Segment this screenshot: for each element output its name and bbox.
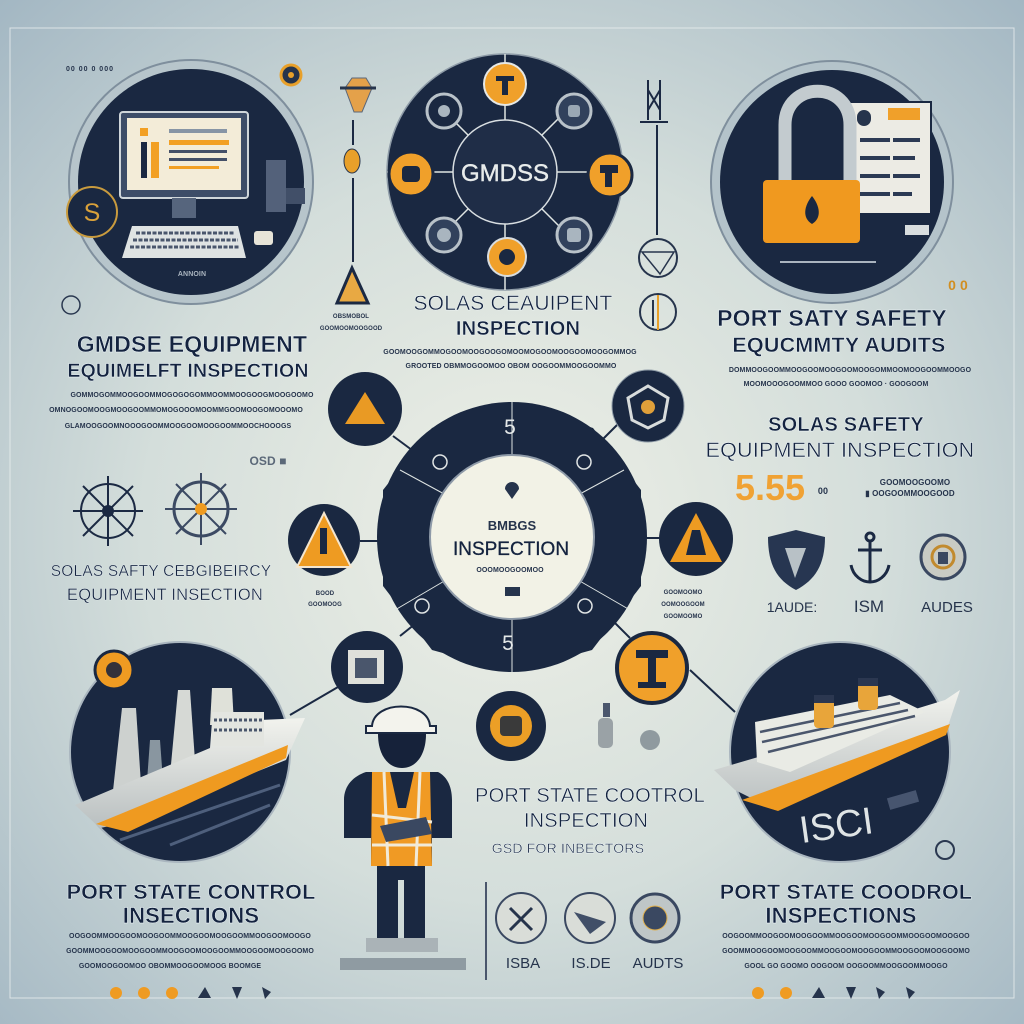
panel: GMDSS circle (387, 54, 632, 290)
heading: port state left: INSECTIONS (123, 903, 259, 928)
number: top 5: 5 (504, 416, 516, 439)
label: ISCI: ISCI (797, 800, 876, 852)
caption: right of number: ▮ OOGOOMMOOGOOD (865, 489, 955, 498)
icon: keyboard (122, 226, 273, 258)
text block: lower-left body (66, 933, 314, 970)
heading: port state center: PORT STATE COOTROL (475, 785, 705, 807)
icon: lighthouse column: OBSMOBOL (333, 314, 369, 320)
text block: lower-left body: OOGOOMMOOGOOMOOGOOMMOOGOOMOOGOOMMOOGOOMOOGO (69, 933, 311, 940)
icon: top-right shield node (612, 370, 684, 442)
icon: upper-right node (557, 94, 591, 128)
heading: SOLAS center (413, 292, 613, 340)
heading: port security: EQUCMMTY AUDITS (732, 333, 946, 357)
icon: Audits circle (631, 894, 679, 942)
icon: hard hat (366, 706, 436, 733)
small caption under computer: ANNOIN (178, 271, 206, 278)
icon: lower-right node (617, 633, 687, 703)
heading: port state center: INSPECTION (524, 810, 648, 832)
text block: lower-right body: OOGOOMMOOGOOMOOGOOMMOOGOOMOOGOOMMOOGOOMOOGOO (722, 933, 970, 940)
text block: lower-left body: GOOMMOOGOOMOOGOOMMOOGOOMOOGOOMMOOGOOMOOGOOMO (66, 948, 314, 955)
icon: badge (921, 535, 965, 579)
caption: right node: GOOMOOMO (664, 590, 703, 596)
heading: port state right (720, 880, 972, 928)
text block: center top body: GOOMOOGOMMOGOOMOOGOOGOMOOMOGOOMOOGOOMOOGOMMOG (383, 349, 637, 356)
heading: port state left (67, 880, 315, 928)
icons: lower-right dots (752, 987, 915, 999)
labels: right icons: ISM (854, 597, 884, 616)
caption: right node: GOOMOOMO (664, 614, 703, 620)
panel: computer circle (67, 60, 313, 304)
labels: right icons: AUDES (921, 599, 973, 616)
text block: lower-left body: GOOMOOGOOMOO OBOMMOOGOOMOOG BOOMGE (79, 963, 261, 970)
small label (887, 790, 919, 810)
icon: funnels (112, 688, 234, 800)
center text: INSPECTION (453, 539, 569, 560)
heading: port state right: INSPECTIONS (765, 903, 917, 928)
icons: lower-left dots (110, 987, 271, 999)
heading: port security: PORT SATY SAFETY (717, 305, 947, 331)
icon: top-left triangle node (328, 372, 402, 446)
heading: SOLAS left: EQUIPMENT INSECTION (67, 586, 263, 604)
caption: right node (661, 590, 705, 620)
panel: ship left (70, 642, 305, 862)
icon: bottom node (476, 691, 546, 761)
icon: anchor (851, 533, 889, 582)
icon: acorn (505, 482, 519, 499)
center text (453, 518, 569, 574)
heading: port state center: GSD FOR INBECTORS (492, 840, 644, 856)
text block: right top body (729, 367, 972, 388)
icon: top node (484, 63, 526, 105)
icon: ISDE circle (565, 893, 615, 943)
base (366, 938, 438, 952)
heading: SOLAS left (51, 563, 271, 604)
connector lines (290, 420, 735, 715)
heading: port state center (475, 785, 705, 856)
labels: lower icons (506, 955, 683, 972)
icon: s badge (67, 187, 117, 237)
icon: right node (588, 153, 632, 197)
icon: small orange dial (281, 65, 301, 85)
icon: upper-left node (427, 94, 461, 128)
icon: left node (389, 152, 433, 196)
caption: right of number: GOOMOOGOOMO (880, 478, 950, 487)
caption: left node (308, 591, 342, 608)
icon: small person figures (598, 703, 660, 750)
heading: SOLAS right: SOLAS SAFETY (768, 414, 924, 436)
icon: ship hull (75, 712, 305, 832)
heading: SOLAS left: SOLAS SAFTY CEBGIBEIRCY (51, 563, 271, 580)
divider line (485, 882, 487, 980)
labels: lower icons: AUDTS (633, 955, 683, 972)
icon: lower-right node (557, 218, 591, 252)
panel: central wheel (377, 402, 647, 672)
icon: small ring (62, 296, 80, 314)
icon: ship wheel (73, 476, 143, 546)
text block: right top body: DOMMOOGOOMMOOGOOMOOGOOMOOGOMMOOMOOGOOMMOOGO (729, 367, 972, 374)
heading: port security (717, 305, 947, 357)
labels: right icons (767, 597, 973, 616)
tablet (380, 817, 432, 842)
body (344, 772, 452, 938)
caption: right node: OOMOOGOOM (661, 602, 705, 608)
text block: lower-right body: GOOMMOOGOOMOOGOOMMOOGOOMOOGOOMMOOGOOMOOGOOMO (722, 948, 970, 955)
vest (371, 772, 432, 866)
caption: small gray tag: OSD ■ (249, 454, 287, 468)
icon: small mark (505, 587, 520, 596)
icon: right warning node (659, 502, 733, 576)
text block: left body: GOMMOGOMMOOGOOMMOGOGOGOMMOOMMOOGOOGMOOGOOMO (70, 392, 314, 399)
icon: ring marks (415, 455, 592, 613)
text block: center top body (383, 349, 637, 370)
heading: SOLAS right (706, 414, 974, 462)
small marks near lock circle: 0 0 (948, 277, 968, 293)
text block: center top body: GROOTED OBMMOGOOMOO OBOM OOGOOMMOOGOOMMO (406, 363, 617, 370)
icon: document (847, 102, 931, 214)
heading: GMDSS equipment: EQUIMELFT INSPECTION (67, 360, 309, 382)
caption: small ring right (936, 841, 954, 859)
icon: lighthouse column: GOOMOOMOOGOOD (320, 326, 383, 332)
icon: left warning node (288, 504, 360, 576)
labels: lower icons: IS.DE (571, 955, 611, 972)
text block: left body: OMNOGOOMOOGMOOGOOMMOMOGOOOMOOMMGOOMOOGOMOOOMO (49, 407, 303, 414)
heading: port state right: PORT STATE COODROL (720, 880, 972, 904)
icon: monitor (120, 112, 248, 218)
text block: left body: GLAMOOGOOMNOOOGOOMMOOGOOMOOGOOMMOOCHOOOGS (65, 423, 291, 430)
text block: lower-right body: GOOL GO GOOMO OOGOOM OOGOOMMOOGOOMMOOGO (744, 963, 948, 970)
icon: flag column (639, 80, 677, 330)
caption: left node: GOOMOOG (308, 602, 342, 608)
caption: left node: BOOD (316, 591, 335, 597)
heading: GMDSS equipment: GMDSE EQUIPMENT (77, 331, 307, 357)
icon: ISBA circle (496, 893, 546, 943)
text block: lower-right body (722, 933, 970, 970)
heading: SOLAS right: EQUIPMENT INSPECTION (706, 438, 974, 462)
number: bottom 5: 5 (502, 632, 514, 655)
labels: right icons: 1AUDE: (767, 599, 817, 615)
figure: inspector (340, 706, 466, 970)
heading: GMDSS equipment (67, 331, 309, 382)
heading: SOLAS center: SOLAS CEAUIPENT (413, 292, 613, 315)
icon: padlock (763, 91, 860, 243)
caption: right of number (865, 478, 955, 498)
center text: OOOMOOGOOMOO (476, 567, 544, 574)
text block: left body (49, 392, 314, 430)
icon: cruise ship (714, 678, 960, 811)
icon: shield (768, 530, 825, 590)
number: 5.55: 5.55 (735, 467, 805, 508)
panel: lock circle (711, 61, 953, 303)
label: GMDSS: GMDSS (461, 160, 549, 187)
panel: ship right (714, 642, 960, 862)
icon: s badge: S (84, 199, 100, 227)
heading: port state left: PORT STATE CONTROL (67, 880, 315, 904)
small caption top left: 00 00 0 000 (66, 66, 114, 73)
heading: SOLAS center: INSPECTION (456, 318, 580, 340)
icon: lower-left node (331, 631, 403, 703)
icon: compass wheel (165, 473, 237, 545)
caption: by number: 00 (818, 486, 828, 496)
labels: lower icons: ISBA (506, 955, 540, 972)
icon: lighthouse column (320, 78, 383, 332)
text block: right top body: MOOMOOOGOOMMOO GOOO GOOMOO · GOOGOOM (744, 381, 928, 388)
icon: orange badge (95, 651, 133, 689)
icon: bottom node (488, 238, 526, 276)
icon: lower-left node (427, 218, 461, 252)
icon: side device (266, 160, 305, 212)
center text: BMBGS (488, 518, 537, 533)
